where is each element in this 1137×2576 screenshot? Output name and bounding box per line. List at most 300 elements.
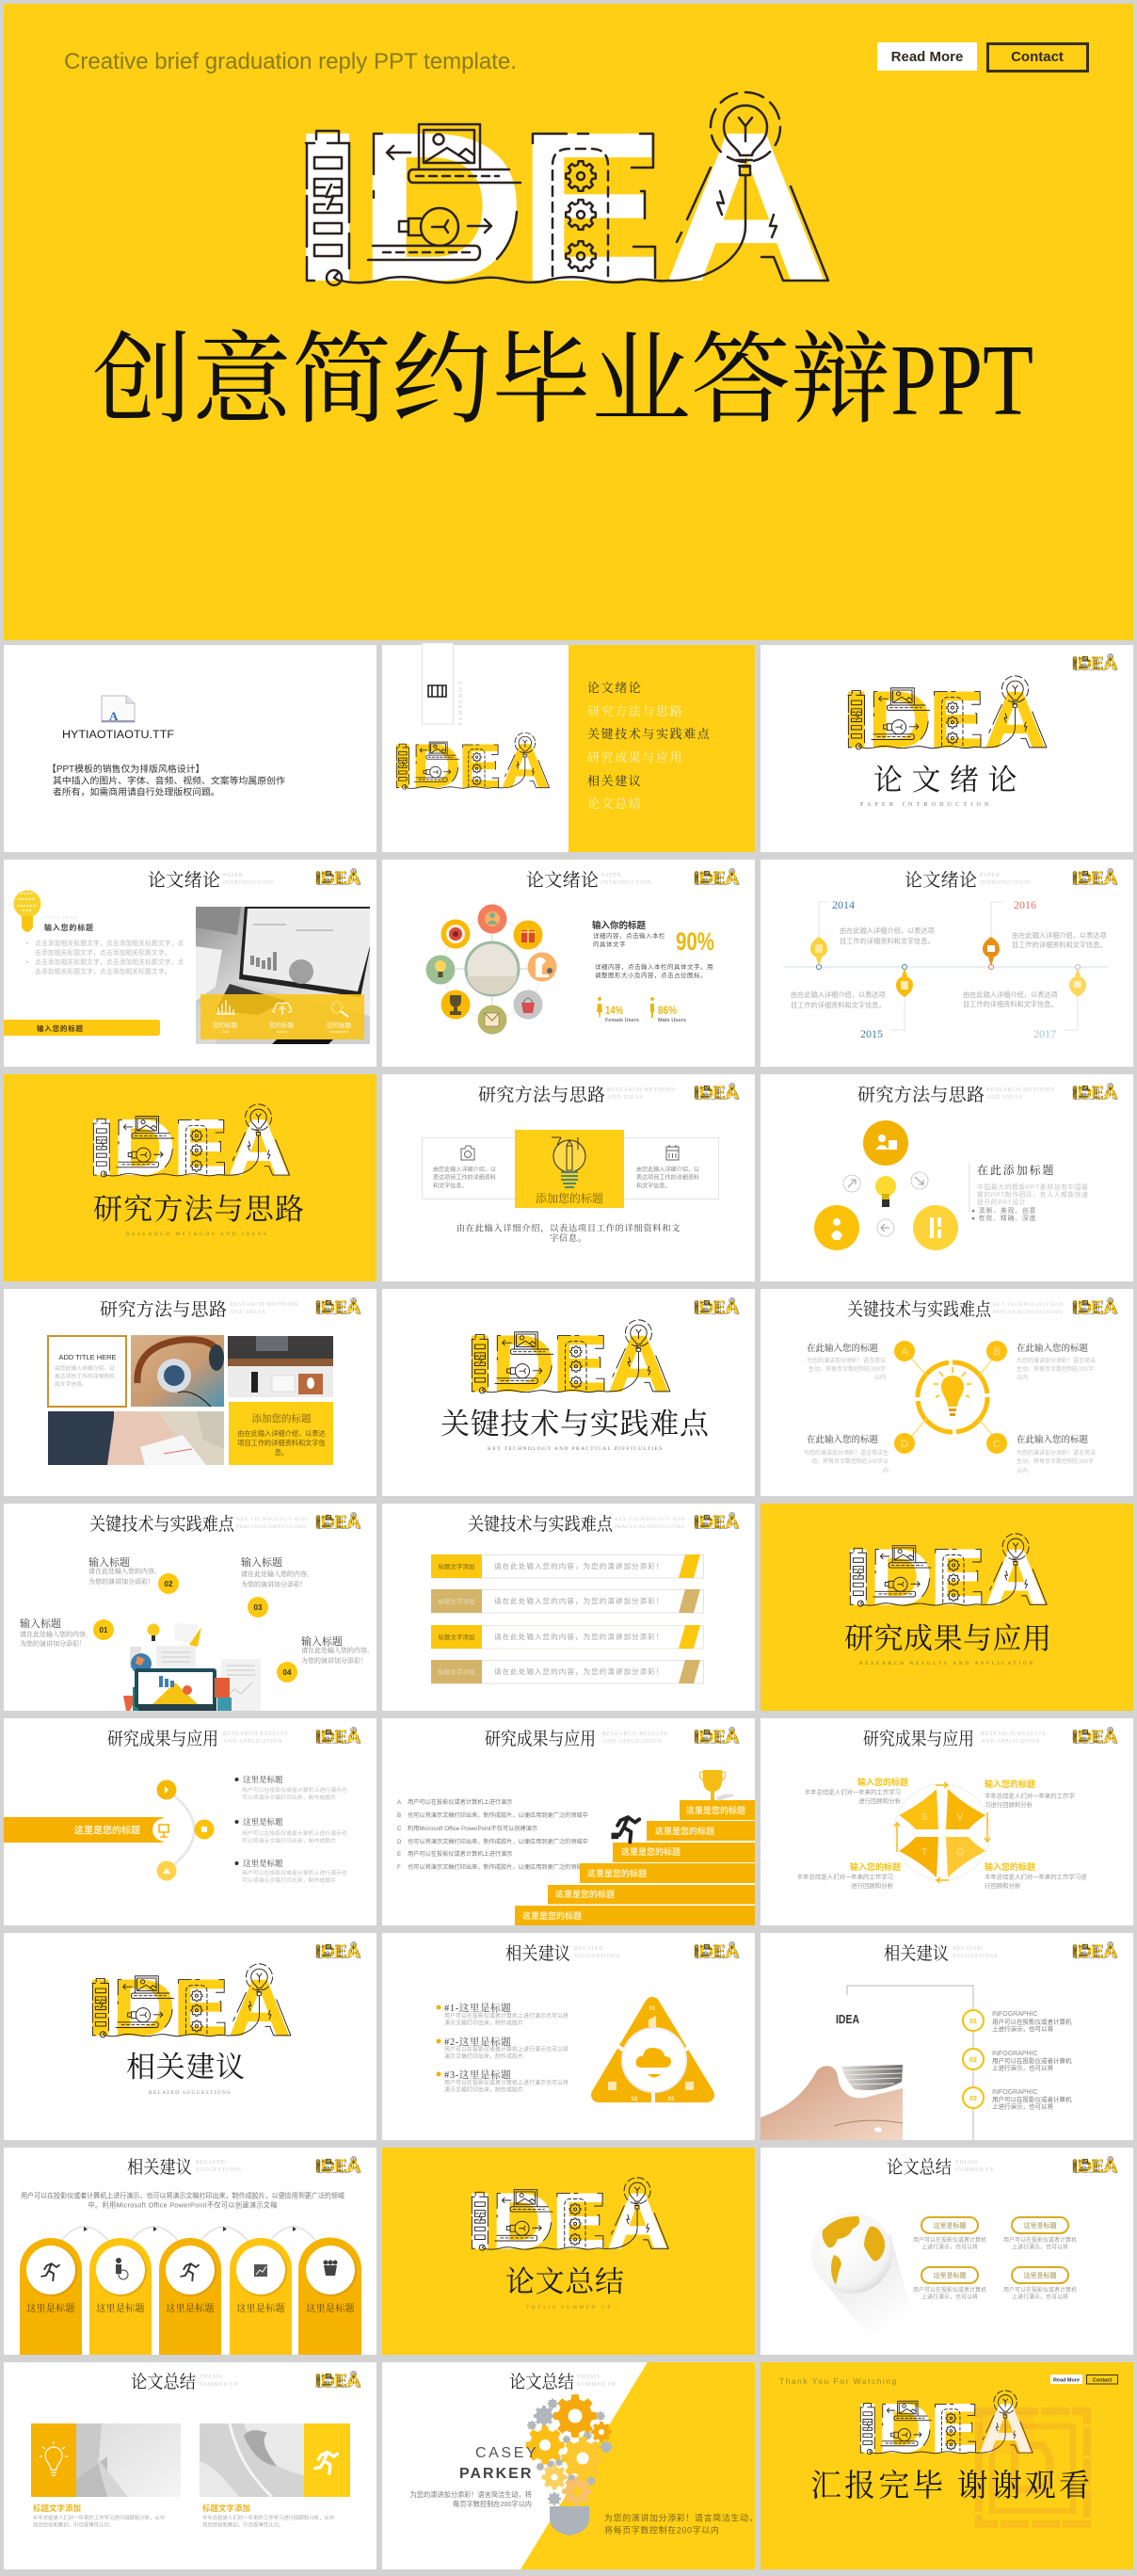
- corner logo: [1071, 868, 1117, 889]
- heading english: [223, 1731, 288, 1745]
- section subtitle: PAPER INTRODUCTION: [860, 802, 993, 808]
- corner logo: A: [346, 1942, 360, 1962]
- info text 1: INFOGRAPHIC: [992, 2011, 1038, 2018]
- menu: 论文总结: [587, 797, 642, 811]
- corner logo: E: [1091, 2156, 1103, 2177]
- heading english: SUMMED UP: [200, 2382, 239, 2388]
- text: input title: TITLE HERE: [44, 915, 78, 920]
- callout 2: 输入标题: [241, 1555, 282, 1569]
- text right: 将每页字数控制在200字以内: [604, 2525, 719, 2535]
- corner logo: A: [1103, 869, 1117, 889]
- heading english: [601, 873, 652, 886]
- corner logo: A: [1103, 1728, 1117, 1747]
- list item 1: [437, 2002, 568, 2026]
- corner logo: [314, 1941, 360, 1962]
- heading english: RESEARCH METHODS: [986, 1087, 1055, 1093]
- corner logo: I: [1071, 1727, 1079, 1747]
- list item 3: #3-这里是标题: [444, 2069, 511, 2081]
- pin 2015: [896, 968, 913, 997]
- heading english: PAPER: [223, 873, 244, 878]
- timeline: [783, 902, 1108, 1030]
- bullet text: 点击添加相关标题文字，点击添加相关标题文字，点: [35, 939, 184, 947]
- bullet text: 击添加相关标题文字，点击添加相关标题文字。: [35, 967, 171, 975]
- corner logo: I: [314, 1512, 322, 1532]
- logo: IDEA: [391, 731, 550, 802]
- heading english: [602, 1731, 668, 1745]
- circle infographic: [425, 904, 557, 1034]
- pin 2017: [1069, 968, 1086, 997]
- corner logo: E: [1091, 653, 1103, 674]
- pill labels: 这里是标题: [934, 2271, 966, 2279]
- heading english: RELATED: [953, 1946, 983, 1952]
- yellow text card: 息。: [275, 1448, 288, 1457]
- corner logo: E: [334, 1727, 346, 1747]
- corner logo: I: [1071, 1297, 1079, 1317]
- panel: key technology list: [382, 1504, 755, 1711]
- corner logo: D: [321, 1513, 335, 1533]
- node: top: [478, 904, 506, 934]
- heading english: [577, 2375, 617, 2388]
- corner logo: D: [321, 1728, 335, 1747]
- info text 1: 上进行演示，也可以将: [992, 2024, 1054, 2033]
- heading english: AND IDEAS: [607, 1095, 643, 1101]
- heading: 论文总结: [131, 2372, 196, 2392]
- label bottom left: 输入您的标题: [850, 1861, 901, 1872]
- heading: 相关建议: [127, 2157, 192, 2178]
- info text 3: [992, 2089, 1072, 2111]
- timeline text: 目工作的详细资料和文字信息。: [963, 1000, 1058, 1008]
- section subtitle: KEY TECHNOLOGY AND PRACTICAL DIFFICULTIES: [488, 1446, 663, 1452]
- corner logo: I: [314, 1297, 322, 1317]
- heading english: THESIS: [577, 2375, 601, 2380]
- text: input title: 输入你的标题: [592, 920, 647, 931]
- pill labels: 这里是标题: [934, 2221, 966, 2230]
- text: right: 和文字信息。: [636, 1183, 671, 1190]
- corner logo: D: [1078, 1942, 1092, 1962]
- corner logo: [693, 868, 739, 889]
- left photo: building: [76, 2423, 181, 2497]
- node: mail: [478, 1006, 506, 1034]
- corner logo: D: [321, 1942, 335, 1962]
- panel: contents: [382, 643, 755, 852]
- caption right: 找出经验和教训，引出规律性认识。: [202, 2521, 283, 2529]
- node numbers: 01: [969, 2019, 977, 2025]
- button: read more: Read More: [891, 49, 963, 65]
- corner logo: I: [693, 1941, 700, 1961]
- notice text: [47, 763, 285, 798]
- row 2: 请在此处输入您的内容，为您的演讲加分添彩！: [494, 1596, 664, 1605]
- heading: 论文总结: [887, 2157, 952, 2178]
- corner logo: D: [699, 1942, 713, 1962]
- row 2: 标题文字添加: [439, 1597, 474, 1605]
- list: 用户可以在投影仪或者计算机上进行演示: [408, 1798, 512, 1806]
- list item 1: 演示文稿打印出来，制作成胶片: [444, 2019, 523, 2026]
- corner logo: E: [713, 1297, 725, 1318]
- section title: 论文总结: [505, 2265, 624, 2298]
- corner logo: A: [1103, 1084, 1117, 1103]
- photo: headphones: [131, 1335, 224, 1407]
- stairs: 这里是您的标题: [555, 1889, 615, 1899]
- callout 3: 为您的演讲加分添彩！: [20, 1639, 86, 1648]
- logo: IDEA: E: [173, 1103, 228, 1193]
- callout 1: [88, 1555, 161, 1586]
- list item 2: 用户可以在投影仪或者计算机上进行演示也可以将: [444, 2045, 568, 2053]
- column 5: 这里是标题: [306, 2302, 355, 2314]
- info text 2: 上进行演示，也可以将: [992, 2064, 1054, 2071]
- corner logo: D: [699, 1298, 713, 1318]
- corner logo: D: [699, 869, 713, 889]
- text: right: [636, 1166, 699, 1190]
- text: detail 1: 的具体文字: [593, 940, 626, 948]
- photo: handshake: [48, 1411, 224, 1465]
- panel: section related suggestions: [4, 1933, 376, 2140]
- logo: IDEA: I: [464, 1319, 496, 1409]
- badges: C: [993, 1439, 1001, 1450]
- list: B: [397, 1812, 401, 1819]
- corner logo: [314, 2371, 360, 2391]
- pill body text: 上进行演示，也可以将: [1012, 2243, 1068, 2250]
- callout 4: 输入标题: [301, 1634, 343, 1648]
- overlay: yellow stats: [200, 994, 364, 1039]
- heading english: [980, 873, 1031, 886]
- corner logo: D: [699, 1084, 713, 1103]
- panel: section thesis summary: [382, 2148, 755, 2355]
- yellow text card: 添加您的标题: [252, 1412, 312, 1425]
- text block: ● 清晰、美观、创意: [971, 1206, 1036, 1215]
- text item 3: 可以将演示文稿打印出来，制作成胶片: [242, 1876, 336, 1884]
- label bottom right: 半年总结是人们对一年来的工作学习进: [985, 1872, 1087, 1881]
- circle: lower left: [814, 1205, 859, 1250]
- callout 3: 输入标题: [20, 1617, 61, 1630]
- triangle diagram: 03: [668, 2097, 675, 2102]
- list item 3: 用户可以在投影仪或者计算机上进行演示也可以将: [444, 2079, 568, 2086]
- photo: hand holding coins: [761, 2065, 903, 2140]
- stat: female users: [597, 997, 639, 1023]
- heading english: [993, 1302, 1064, 1315]
- yellow text card: [229, 1402, 333, 1465]
- corner logo: I: [1071, 2156, 1079, 2176]
- corner logo: I: [1071, 653, 1079, 673]
- label bottom left: 半年总结是人们对一年来的工作学习: [797, 1872, 893, 1881]
- logo: IDEA: E: [458, 733, 502, 801]
- text item 2: 可以将演示文稿打印出来，制作成胶片: [242, 1837, 336, 1844]
- logo: IDEA: A: [978, 2389, 1033, 2468]
- overlay: yellow stats: Upload: [276, 1030, 287, 1034]
- connector arcs: [60, 2227, 316, 2242]
- text block: 提升的PPT设计: [977, 1198, 1026, 1206]
- text left: [410, 2490, 532, 2508]
- intro text: 用户可以在投影仪或者计算机上进行演示，也可以将演示文稿打印出来，制作成胶片，以便应用到更广泛的领域: [21, 2192, 344, 2199]
- overlay: yellow stats: 您的标题: [327, 1021, 352, 1029]
- section title: 论文绪论: [873, 764, 1026, 797]
- corner logo: I: [1071, 1941, 1079, 1961]
- heading english: THESIS: [200, 2375, 223, 2380]
- pill labels: [934, 2221, 1056, 2279]
- text: A: 生动，将每页字数控制在200字: [809, 1365, 886, 1373]
- text: detail 2: 调整图形大小及内容，点击占位图标。: [595, 971, 707, 979]
- text: B: 以内: [1017, 1374, 1028, 1381]
- bullet text: •: [26, 941, 29, 947]
- corner logo: [1071, 2156, 1117, 2177]
- list item 3: [437, 2069, 568, 2094]
- corner logo: D: [1078, 1084, 1092, 1103]
- text: D: 动，将每页字数控制在200字以: [811, 1457, 889, 1465]
- year labels: 2014: [832, 898, 855, 911]
- node numbers: 03: [969, 2096, 977, 2102]
- yellow label bar: 输入您的标题: [37, 1023, 84, 1033]
- panel: methods photo grid: [4, 1289, 376, 1496]
- logo: IDEA: [86, 1102, 290, 1193]
- corner logo: E: [1091, 1297, 1103, 1318]
- logo: IDEA: I: [286, 88, 369, 326]
- heading english: RESEARCH RESULTS: [602, 1731, 668, 1737]
- name: [459, 2445, 538, 2482]
- corner logo: [693, 1941, 739, 1962]
- contents tab: CONTENTS: [456, 682, 462, 728]
- info text 1: 用户可以在投影仪或者计算机: [992, 2017, 1072, 2026]
- logo: IDEA: I: [842, 1533, 873, 1622]
- stat: 90 percent: 90%: [676, 927, 714, 956]
- list: D: [397, 1839, 402, 1845]
- corner logo: A: [725, 869, 739, 889]
- logo: IDEA: D: [868, 675, 932, 765]
- photo: laptop: [196, 907, 370, 1044]
- heading english: SUGGESTIONS: [953, 1954, 999, 1959]
- label bottom left: [797, 1861, 901, 1890]
- heading english: AND APPLICATION: [223, 1739, 282, 1745]
- text: left: 由您此输入详细介绍，以: [433, 1166, 496, 1173]
- caption right: [202, 2504, 334, 2529]
- section subtitle: RESEARCH RESULTS AND APPLICATION: [859, 1661, 1033, 1666]
- corner logo: E: [1091, 868, 1103, 889]
- corner logo: I: [693, 1512, 700, 1532]
- corner logo: A: [725, 1084, 739, 1103]
- column 2: [89, 2238, 152, 2355]
- logo: IDEA: A: [985, 1532, 1048, 1621]
- center bulb: [875, 1176, 896, 1207]
- stat: male users: Male Users: [658, 1018, 686, 1023]
- section title: 关键技术与实践难点: [440, 1408, 710, 1441]
- SWOT diagram: T: [921, 1847, 927, 1858]
- row 1: 请在此处输入您的内容，为您的演讲加分添彩！: [494, 1561, 664, 1570]
- menu: 关键技术与实践难点: [587, 727, 711, 741]
- logo: IDEA: I: [841, 675, 873, 765]
- corner logo: [693, 1727, 739, 1747]
- row 3: 标题文字添加: [439, 1633, 474, 1641]
- left yellow block with bulb: [31, 2423, 76, 2497]
- label bottom right: [985, 1861, 1087, 1890]
- panel: summary Casey Parker: [382, 2362, 758, 2569]
- heading english: SUMMED UP: [955, 2167, 995, 2173]
- panel: results SWOT: [761, 1718, 1133, 1925]
- heading: 研究成果与应用: [107, 1729, 218, 1749]
- photo: desk: [228, 1336, 333, 1397]
- section subtitle: THESIS SUMMED UP: [526, 2305, 611, 2310]
- name: PARKER: [459, 2466, 533, 2482]
- section subtitle: RESEARCH METHODS AND IDEAS: [126, 1232, 267, 1237]
- corner logo: E: [1091, 1727, 1103, 1747]
- corner logo: D: [321, 2157, 335, 2177]
- icon: trophy: [699, 1770, 735, 1801]
- text: C: [1017, 1434, 1096, 1474]
- panel: font notice: [4, 645, 376, 852]
- corner logo: D: [321, 869, 335, 889]
- corner logo: I: [314, 1727, 322, 1747]
- caption left: 半年总结是人们对一年来的工作学习进行回顾和分析，从中: [33, 2514, 165, 2521]
- list item 1: 用户可以在投影仪或者计算机上进行演示也可以将: [444, 2012, 568, 2020]
- callout 3: [20, 1617, 92, 1648]
- text: input title: 输入您的标题: [44, 923, 94, 932]
- yellow column: [568, 645, 755, 852]
- SWOT diagram: V: [957, 1812, 964, 1823]
- pill body text: 上进行演示，也可以将: [1012, 2294, 1068, 2301]
- heading english: PAPER: [601, 873, 622, 878]
- number badges: 01: [100, 1626, 108, 1634]
- logo: IDEA: E: [518, 87, 665, 326]
- corner logo: E: [1091, 1083, 1103, 1103]
- pill body text: 用户可以在投影仪或者计算机: [1003, 2286, 1077, 2294]
- heading english: [574, 1946, 620, 1959]
- label top right: 半年总结是人们对一年来的工作学: [985, 1791, 1075, 1800]
- watermark: [979, 2411, 1087, 2524]
- text: D: 内: [883, 1467, 889, 1474]
- stairs: 这里是您的标题: [587, 1868, 647, 1878]
- corner logo: I: [693, 1297, 700, 1317]
- heading english: RESEARCH METHODS: [230, 1302, 298, 1308]
- corner logo: E: [713, 1083, 725, 1103]
- icon: camera: [461, 1146, 474, 1160]
- triangle diagram: [599, 2004, 707, 2106]
- text: A: [807, 1343, 886, 1381]
- column 5: [298, 2237, 361, 2355]
- list item 2: 演示文稿打印出来，制作成胶片: [444, 2053, 523, 2060]
- SWOT diagram: [894, 1782, 990, 1883]
- corner logo: D: [1078, 654, 1092, 674]
- callout 2: 请在此处输入您的内容，: [241, 1570, 313, 1579]
- badges: [894, 1341, 1007, 1454]
- heading english: RESEARCH METHODS: [607, 1087, 676, 1093]
- heading english: INTRODUCTION: [223, 880, 274, 886]
- panel: introduction circle infographic: [382, 860, 755, 1067]
- center description: [456, 1222, 681, 1243]
- heading: 论文绪论: [526, 870, 599, 891]
- text: right: 由您此输入详细介绍，以: [636, 1166, 699, 1173]
- label top left: 输入您的标题: [857, 1777, 908, 1787]
- heading english: PRACTICAL DIFFICULTIES: [236, 1524, 306, 1530]
- label bottom right: 行回顾和分析: [985, 1881, 1021, 1890]
- year labels: 2015: [860, 1027, 883, 1040]
- corner logo: [314, 1512, 360, 1533]
- panel: results with stairs: [382, 1718, 755, 1925]
- text block: 做的PPT制作团队，有人人都能快速: [977, 1190, 1089, 1199]
- logo: IDEA: D: [112, 1963, 176, 2053]
- list: 也可以将演示文稿打印出来，制作成胶片，以便应用到更广泛的领域中: [408, 1811, 588, 1819]
- logo: IDEA: A: [228, 1963, 292, 2053]
- corner logo: E: [334, 1512, 346, 1533]
- corner logo: [314, 1727, 360, 1747]
- node: target: [440, 919, 471, 949]
- bullet text: •: [26, 959, 29, 966]
- list: E: [397, 1851, 401, 1858]
- column 2: 这里是标题: [96, 2302, 145, 2314]
- list: C: [397, 1826, 402, 1832]
- node numbers: 02: [969, 2057, 977, 2064]
- thank you line: Thank You For Watching: [779, 2376, 898, 2386]
- tagline: Creative brief graduation reply PPT template.: [64, 49, 517, 74]
- label top right: 输入您的标题: [985, 1779, 1035, 1789]
- corner logo: E: [334, 868, 346, 889]
- corner logo: E: [713, 1727, 725, 1747]
- corner logo: [1071, 1727, 1117, 1747]
- column 4: [230, 2238, 292, 2355]
- corner logo: A: [1103, 1298, 1117, 1318]
- logo: IDEA: [842, 1532, 1048, 1622]
- text right: 为您的演讲加分添彩！语言简洁生动，: [604, 2512, 758, 2523]
- text: A: 为您的演讲加分添彩！语言简洁: [807, 1357, 886, 1364]
- corner logo: A: [346, 2372, 360, 2391]
- right photo: architecture: [200, 2423, 304, 2497]
- section title: 相关建议: [126, 2051, 245, 2084]
- title card: 由您此输入详细介绍，以: [55, 1364, 115, 1372]
- intro text: [21, 2192, 344, 2209]
- text: B: 在此输入您的标题: [1017, 1343, 1089, 1354]
- nodes: [963, 2010, 984, 2108]
- corner logo: A: [1103, 2157, 1117, 2177]
- label top right: [985, 1779, 1075, 1809]
- panel: hero cover: [4, 4, 1133, 640]
- corner logo: I: [314, 1941, 322, 1961]
- column 3: 这里是标题: [166, 2302, 215, 2314]
- node: bulb: [425, 955, 456, 985]
- title card: 和文字信息。: [55, 1380, 88, 1388]
- text item 3: [235, 1859, 347, 1884]
- logo: IDEA: [85, 1962, 292, 2053]
- corner logo: D: [1078, 1728, 1092, 1747]
- center description: 由在此输入详细介绍，以表达项目工作的详细资料和文: [456, 1222, 681, 1233]
- heading english: KEY TECHNOLOGY AND: [615, 1517, 685, 1522]
- center ring and bulb: [911, 1358, 994, 1437]
- badges: B: [993, 1346, 1001, 1358]
- logo: IDEA: A: [607, 1319, 671, 1409]
- right yellow block with runner: [304, 2423, 350, 2497]
- tint on logo: [979, 2411, 1033, 2455]
- logo: IDEA: D: [490, 2177, 554, 2266]
- heading english: PRACTICAL DIFFICULTIES: [993, 1310, 1063, 1315]
- SWOT diagram: O: [956, 1847, 964, 1858]
- text: B: 生动，将每页字数控制在200字: [1017, 1365, 1094, 1373]
- text: right: 表达项目工作的详细资料: [636, 1173, 699, 1181]
- badges: D: [901, 1439, 908, 1450]
- heading english: SUGGESTIONS: [574, 1954, 620, 1959]
- label bottom left: 进行回顾和分析: [851, 1881, 894, 1890]
- notice text: 其中插入的图片、字体、音频、视频、文案等均属原创作: [53, 774, 285, 787]
- triangle diagram: 02: [632, 2097, 638, 2102]
- logo: IDEA: I: [85, 1963, 117, 2053]
- text block: [969, 1163, 1089, 1222]
- closing title: 汇报完毕 谢谢观看: [810, 2469, 1090, 2504]
- corner logo: [314, 1297, 360, 1318]
- text item 2: 用户可以在投影仪或者计算机上进行演示也: [242, 1829, 347, 1837]
- overlay: yellow stats: 您的标题: [269, 1021, 294, 1029]
- text item 2: [235, 1817, 347, 1844]
- stairs: 这里是您的标题: [686, 1805, 745, 1815]
- logo: IDEA: D: [357, 88, 526, 327]
- panel: methods with three circles: [761, 1074, 1133, 1281]
- heading: 相关建议: [884, 1943, 949, 1964]
- bullet text: [26, 939, 184, 975]
- heading english: [196, 2160, 242, 2173]
- text item 1: 可以将演示文稿打印出来，制作成胶片: [242, 1794, 336, 1801]
